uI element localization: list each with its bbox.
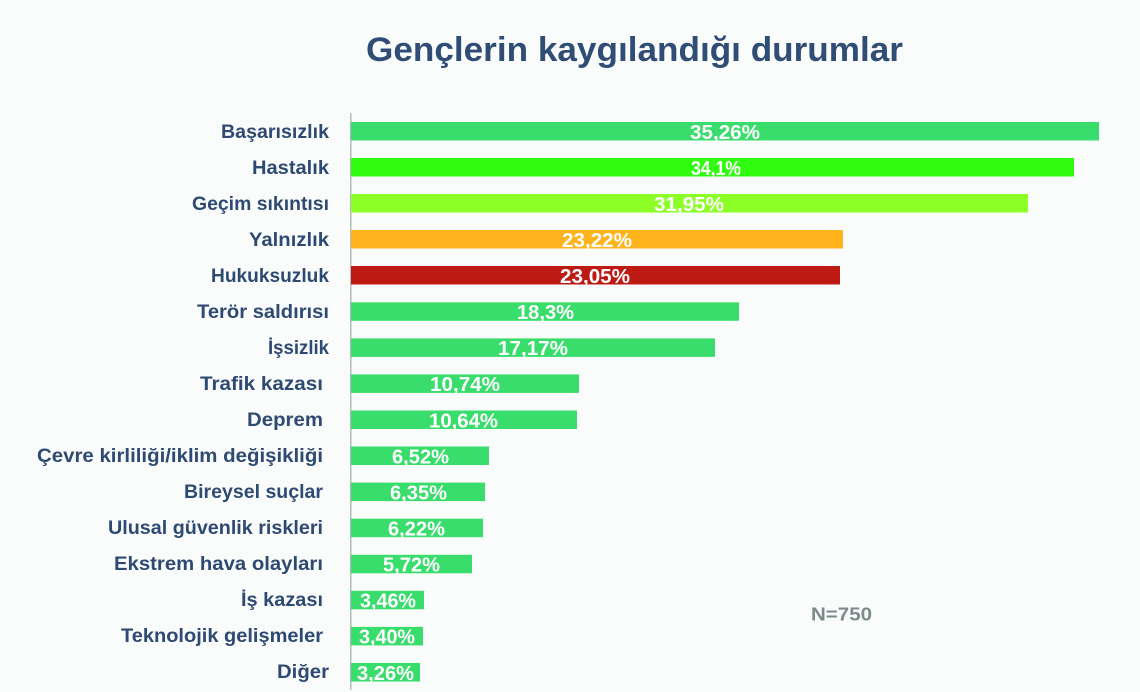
- row: Bireysel suçlar: Bireysel suçlar: [184, 481, 323, 503]
- row: Hastalık: Hastalık: [252, 157, 329, 179]
- row: Geçim sıkıntısı: 31,95%: [654, 193, 724, 216]
- axis line: [350, 113, 352, 690]
- row: Yalnızlık: Yalnızlık: [249, 229, 329, 251]
- row: Deprem: [247, 409, 577, 432]
- row: Teknolojik gelişmeler: Teknolojik gelişmeler: [121, 625, 323, 647]
- row: Bireysel suçlar: [184, 481, 485, 504]
- row: Trafik kazası: 10,74%: [430, 373, 500, 396]
- row: Deprem: 10,64%: [429, 410, 498, 432]
- row: Ekstrem hava olayları: 5,72%: [383, 554, 440, 576]
- bar chart: [37, 113, 1099, 690]
- row: Hastalık: 34,1%: [691, 157, 741, 180]
- row: İşsizlik: İşsizlik: [268, 336, 329, 359]
- row: Diğer: Diğer: [277, 661, 329, 683]
- row: Hukuksuzluk: 23,05%: [560, 265, 630, 288]
- row: Diğer: [277, 661, 420, 685]
- row: Ekstrem hava olayları: Ekstrem hava olayları: [114, 553, 323, 575]
- row: İş kazası: 3,46%: [360, 590, 416, 612]
- row: Başarısızlık: 35,26%: [690, 121, 760, 144]
- row: Diğer: 3,26%: [357, 662, 414, 685]
- row: Bireysel suçlar: 6,35%: [390, 482, 447, 504]
- row: Ekstrem hava olayları: [114, 553, 472, 576]
- row: Terör saldırısı: 18,3%: [517, 301, 574, 324]
- sample size note: N=750: [811, 604, 872, 625]
- row: Çevre kirliliği/iklim değişikliği: 6,52%: [392, 446, 449, 468]
- row: Geçim sıkıntısı: Geçim sıkıntısı: [192, 193, 329, 215]
- row: Ulusal güvenlik riskleri: [108, 517, 483, 540]
- row: Teknolojik gelişmeler: [121, 625, 423, 648]
- row: Deprem: Deprem: [247, 409, 323, 431]
- row: Hukuksuzluk: Hukuksuzluk: [211, 265, 329, 287]
- row: Terör saldırısı: Terör saldırısı: [197, 301, 329, 323]
- row: İşsizlik: [268, 336, 715, 360]
- row: Teknolojik gelişmeler: 3,40%: [359, 626, 415, 648]
- row: Ulusal güvenlik riskleri: 6,22%: [388, 518, 445, 540]
- row: Çevre kirliliği/iklim değişikliği: [37, 445, 489, 468]
- row: Yalnızlık: [249, 229, 843, 252]
- row: Ulusal güvenlik riskleri: Ulusal güvenlik riskleri: [108, 517, 323, 539]
- row: Başarısızlık: [221, 121, 1099, 144]
- row: İşsizlik: 17,17%: [498, 337, 568, 360]
- row: Başarısızlık: Başarısızlık: [221, 121, 329, 143]
- row: Trafik kazası: Trafik kazası: [200, 373, 323, 395]
- row: İş kazası: [241, 588, 424, 612]
- row: Trafik kazası: [200, 373, 579, 396]
- title: Gençlerin kaygılandığı durumlar: [366, 31, 903, 69]
- row: Hastalık: [252, 157, 1074, 180]
- row: Geçim sıkıntısı: [192, 193, 1028, 216]
- row: Çevre kirliliği/iklim değişikliği: Çevre kirliliği/iklim değişikliği: [37, 445, 323, 467]
- row: Yalnızlık: 23,22%: [562, 229, 632, 252]
- row: Hukuksuzluk: [211, 265, 840, 288]
- row: Terör saldırısı: [197, 301, 739, 324]
- row: İş kazası: İş kazası: [241, 588, 323, 611]
